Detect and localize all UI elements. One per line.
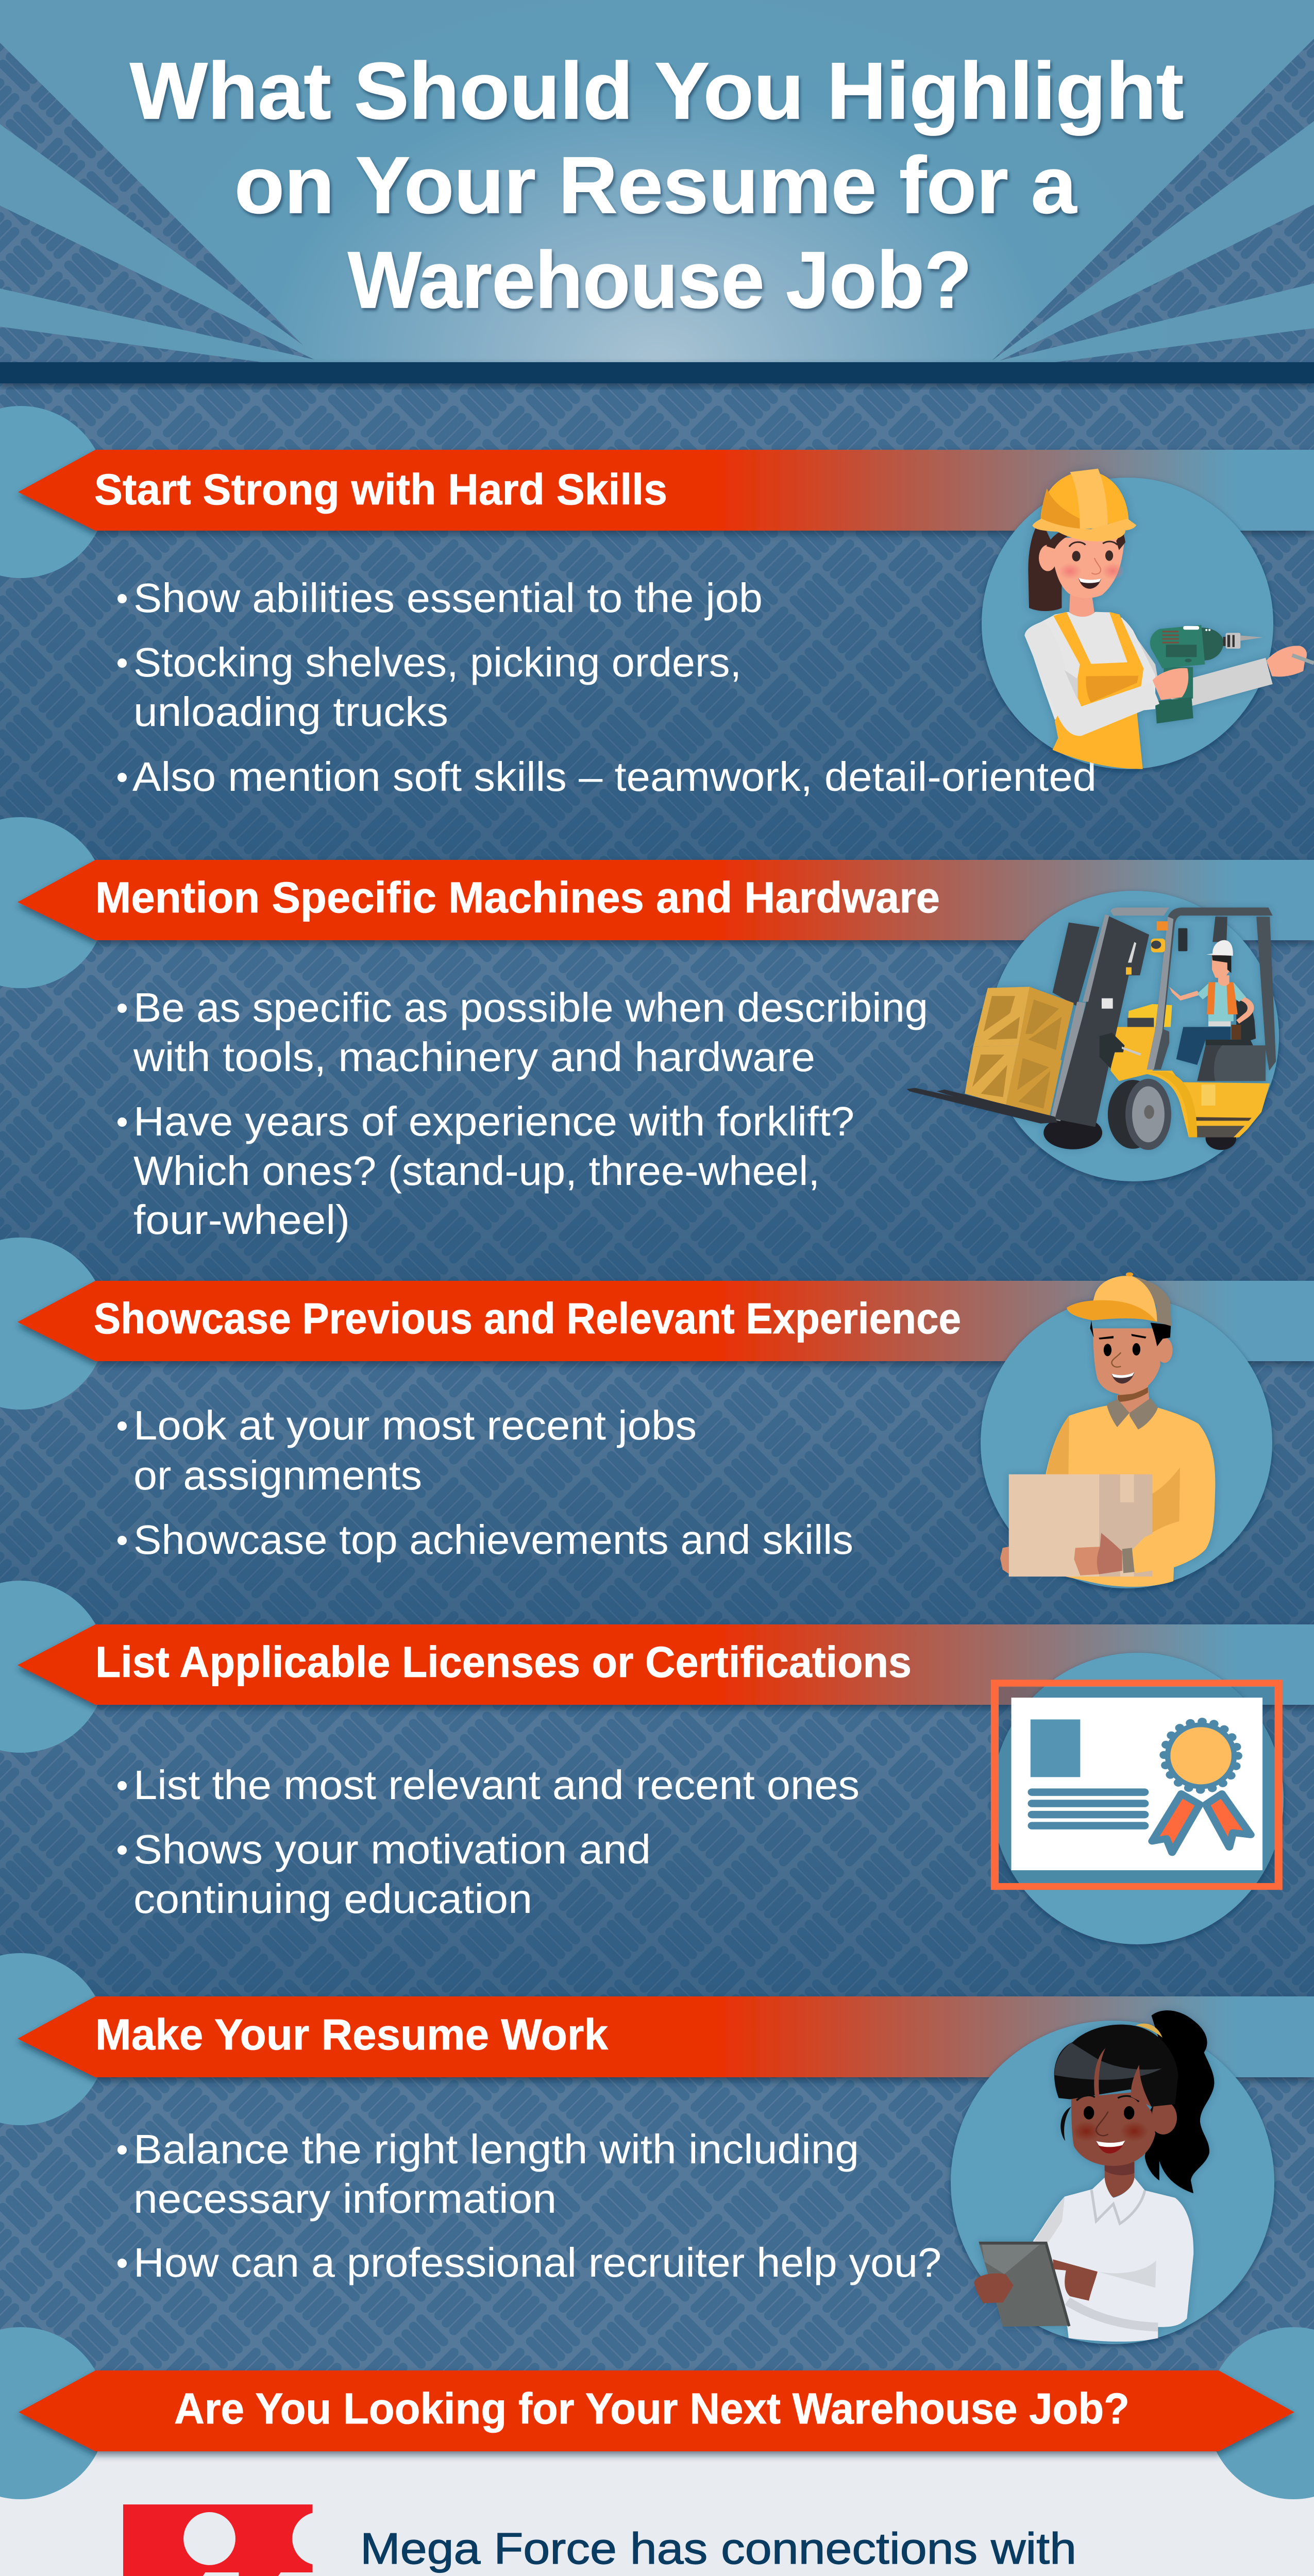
bullet list: with tools, machinery and hardware (133, 1034, 815, 1080)
bottom light panel (0, 2421, 1314, 2576)
side circle (0, 1581, 107, 1753)
panel: licenses and certifications (0, 1581, 1314, 1944)
title: Warehouse Job? (348, 235, 972, 325)
bullet list: Show abilities essential to the job (133, 575, 763, 621)
bullet list (117, 1402, 853, 1563)
bullet list (117, 1762, 860, 1922)
title: on Your Resume for a (234, 141, 1077, 230)
ribbon banner (18, 1624, 1314, 1705)
side circle (0, 406, 107, 578)
heading: Are You Looking for Your Next Warehouse Job? (174, 2384, 1130, 2433)
bullet list: Look at your most recent jobs (133, 1402, 697, 1448)
left side circle (0, 2327, 107, 2499)
right side circle (1207, 2327, 1314, 2499)
header divider band (0, 362, 1314, 383)
bullet list: How can a professional recruiter help you? (133, 2240, 941, 2285)
heading: Mention Specific Machines and Hardware (95, 873, 940, 922)
heading: Start Strong with Hard Skills (94, 465, 667, 514)
ribbon banner (18, 1996, 1314, 2077)
icon: certificate with rosette (995, 1683, 1278, 1887)
icon backdrop circle (988, 891, 1279, 1181)
side circle (0, 817, 106, 988)
logo: Mega Force (123, 2504, 314, 2576)
icon backdrop circle (981, 1297, 1272, 1588)
panel: hard skills (0, 406, 1314, 800)
heading: Make Your Resume Work (95, 2010, 608, 2059)
ribbon banner (19, 2370, 1294, 2451)
bullet list: List the most relevant and recent ones (133, 1762, 860, 1808)
bullet list: necessary information (133, 2176, 557, 2222)
side circle (0, 1953, 107, 2125)
bullet list: Also mention soft skills – teamwork, detail-oriented (132, 754, 1097, 800)
title (130, 46, 1184, 325)
heading: List Applicable Licenses or Certifications (95, 1638, 912, 1686)
bullet list: or assignments (133, 1452, 422, 1498)
bullet list: unloading trucks (133, 689, 448, 735)
bullet list (117, 575, 1097, 800)
side circle (0, 1238, 107, 1410)
heading: Showcase Previous and Relevant Experience (94, 1294, 961, 1343)
header panel (0, 0, 1314, 363)
icon: delivery worker with box (1000, 1273, 1215, 1587)
bullet list: Balance the right length with including (133, 2126, 859, 2172)
bullet list: Have years of experience with forklift? (133, 1098, 854, 1144)
bullet list: Be as specific as possible when describing (133, 985, 928, 1030)
icon: recruiter with tablet (974, 2010, 1214, 2342)
icon: forklift with driver (907, 908, 1276, 1150)
bullet list (117, 2126, 941, 2285)
ribbon banner (18, 1281, 1314, 1361)
icon backdrop circle (982, 478, 1273, 769)
title: What Should You Highlight (130, 46, 1184, 136)
sunburst rays (0, 39, 1314, 363)
bullet list: Which ones? (stand-up, three-wheel, (133, 1148, 820, 1194)
bullet list: continuing education (133, 1876, 532, 1922)
bullet list (117, 985, 928, 1243)
bullet list: Stocking shelves, picking orders, (133, 639, 742, 685)
panel: call to action (0, 2327, 1314, 2499)
ribbon banner (18, 860, 1314, 940)
bullet list: four-wheel) (133, 1197, 350, 1243)
ribbon banner (18, 450, 1314, 531)
bullet list: Shows your motivation and (133, 1826, 651, 1872)
text block: Mega Force connections: Mega Force has connections with (360, 2524, 1076, 2573)
panel: make your resume work (0, 1953, 1314, 2344)
panel: machines and hardware (0, 817, 1314, 1243)
icon backdrop circle (992, 1653, 1284, 1944)
panel: previous experience (0, 1238, 1314, 1588)
icon: woman with drill (1024, 469, 1314, 769)
bullet list: Showcase top achievements and skills (133, 1517, 853, 1563)
icon backdrop circle (951, 2021, 1274, 2344)
